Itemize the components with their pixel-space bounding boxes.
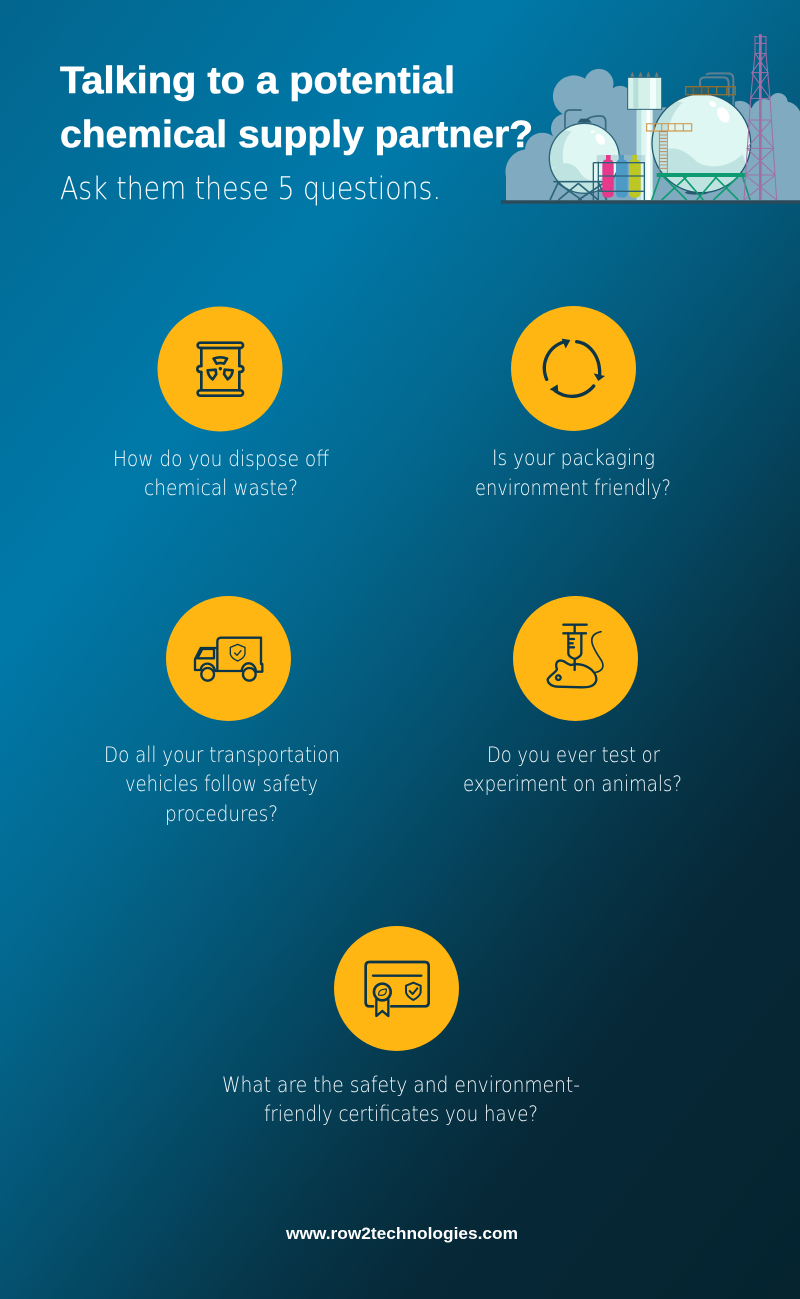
icon: truck with shield	[166, 596, 291, 721]
ground line	[501, 200, 800, 204]
text	[222, 1073, 580, 1126]
gas cylinders	[593, 155, 645, 200]
text: How do you dispose off	[113, 447, 329, 471]
large sphere tank	[647, 73, 757, 200]
text: procedures?	[165, 802, 278, 826]
question 4: animal testing	[463, 596, 682, 796]
text: environment friendly?	[475, 476, 671, 500]
subtitle: Ask them these 5 questions.	[60, 171, 441, 207]
small sphere tank	[547, 110, 623, 200]
text: Do you ever test or	[487, 743, 660, 767]
icon: recycling arrows	[511, 306, 636, 431]
text: What are the safety and environment-	[222, 1073, 580, 1097]
question 1: chemical waste	[113, 306, 329, 500]
question 3: transportation	[104, 596, 340, 826]
water tower	[628, 72, 662, 200]
text	[475, 446, 671, 500]
text: vehicles follow safety	[125, 772, 318, 796]
text	[104, 743, 340, 826]
text: friendly certificates you have?	[264, 1102, 538, 1126]
text: Is your packaging	[492, 446, 655, 470]
illustration: chemical plant	[501, 34, 800, 204]
title	[60, 60, 533, 156]
icon: radioactive barrel	[158, 306, 282, 432]
icon: syringe and mouse	[513, 596, 638, 721]
text	[463, 743, 682, 796]
text: experiment on animals?	[463, 772, 682, 796]
question 5: certificates	[222, 926, 580, 1126]
title: chemical supply partner?	[60, 114, 533, 156]
icon: certificate	[334, 926, 459, 1051]
footer url: www.row2technologies.com	[285, 1224, 518, 1243]
text	[113, 447, 329, 500]
cloud backdrop	[505, 69, 800, 200]
question 2: packaging	[475, 306, 671, 500]
radio tower	[744, 34, 777, 200]
title: Talking to a potential	[60, 60, 455, 102]
text: chemical waste?	[144, 476, 298, 500]
text: Do all your transportation	[104, 743, 340, 767]
